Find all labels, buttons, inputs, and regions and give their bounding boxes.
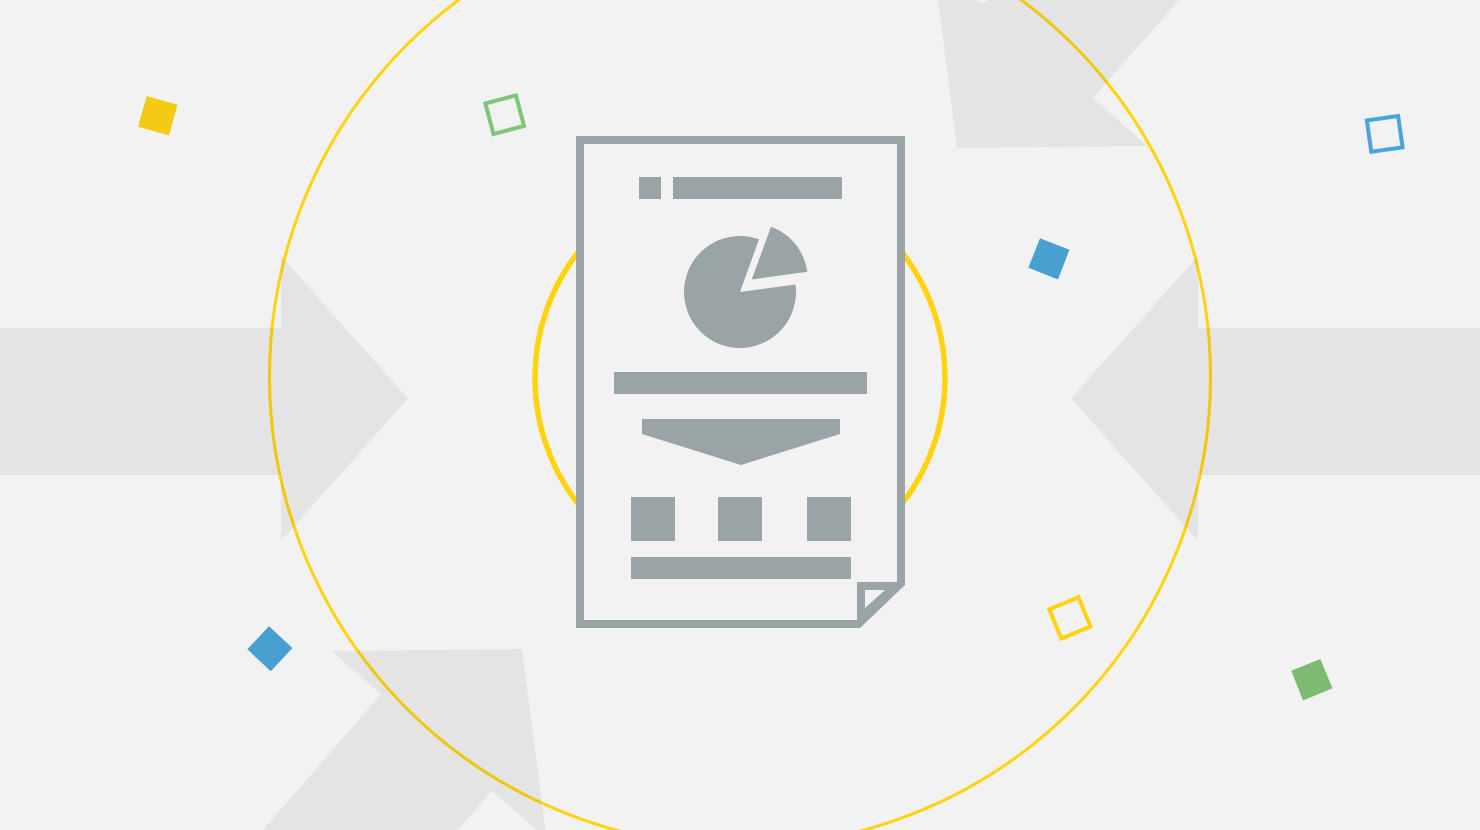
arrow: bottom left diagonal: [263, 649, 546, 830]
square block right: [807, 497, 851, 541]
green filled square: [1291, 659, 1332, 700]
pie exploded slice: [752, 227, 807, 280]
header bar: [673, 177, 842, 199]
blue filled diamond: [247, 626, 292, 671]
arrow: top right diagonal: [938, 0, 1179, 148]
square block middle: [718, 497, 762, 541]
arrow: right pointing left: [1071, 256, 1480, 541]
yellow filled square: [138, 96, 178, 136]
green outlined square: [485, 95, 524, 134]
icon: report document: [576, 136, 905, 628]
document outline with folded corner: [576, 136, 905, 628]
square block left: [631, 497, 675, 541]
blue outlined square: [1367, 116, 1403, 152]
pie main body: [684, 236, 796, 348]
pie chart: [684, 227, 807, 348]
yellow outlined square: [1049, 597, 1091, 639]
blue filled square: [1028, 238, 1070, 280]
arrow: left pointing right: [0, 256, 408, 541]
funnel down arrow: [642, 419, 840, 465]
document page fill: [576, 136, 905, 628]
header marker: [639, 177, 661, 199]
inner yellow circle: [535, 173, 945, 583]
wide text bar: [614, 372, 867, 394]
large yellow circle: [270, 0, 1210, 830]
bottom text bar: [631, 557, 851, 579]
